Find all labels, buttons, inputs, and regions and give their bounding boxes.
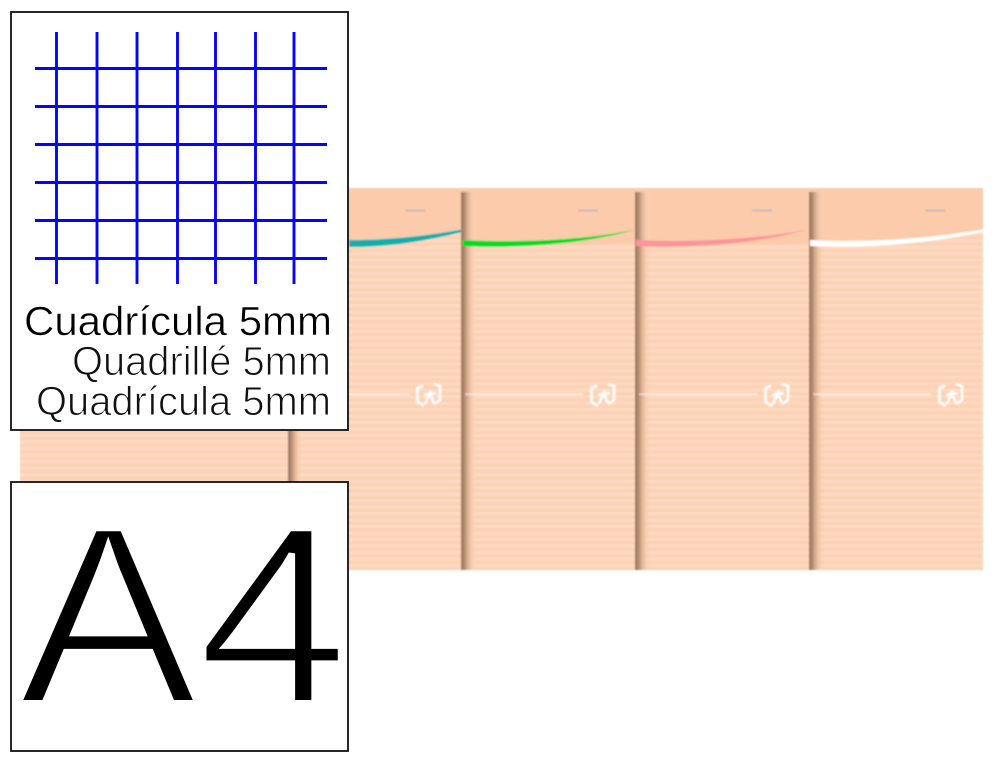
cover logos [418, 384, 962, 406]
notebooks product photo [20, 188, 983, 570]
A4 label: 4 [197, 473, 349, 757]
logo 3 [766, 384, 788, 406]
A4 label: A [18, 473, 198, 757]
logo 2 [592, 384, 614, 406]
grid icon [35, 32, 327, 284]
white cover lines [349, 394, 931, 395]
notebook 3: pink band [636, 230, 808, 247]
notebook spine shadows [288, 192, 824, 570]
label: Portuguese: Quadrícula 5mm [36, 378, 331, 424]
grey marks on notebook covers [405, 210, 945, 212]
notebook header band [349, 188, 983, 245]
notebook body pages [20, 188, 983, 570]
logo 4 [940, 384, 962, 406]
panel: paper size [11, 473, 349, 757]
label: French: Quadrillé 5mm [72, 338, 331, 384]
label: Spanish: Cuadrícula 5mm [24, 298, 332, 344]
A4 label [18, 473, 349, 757]
notebook 4: white band [810, 230, 983, 247]
notebook 2: green band [463, 230, 636, 247]
notebook 1: teal band [349, 230, 462, 247]
panel: grid ruling [11, 12, 348, 430]
logo 1 [418, 384, 440, 406]
